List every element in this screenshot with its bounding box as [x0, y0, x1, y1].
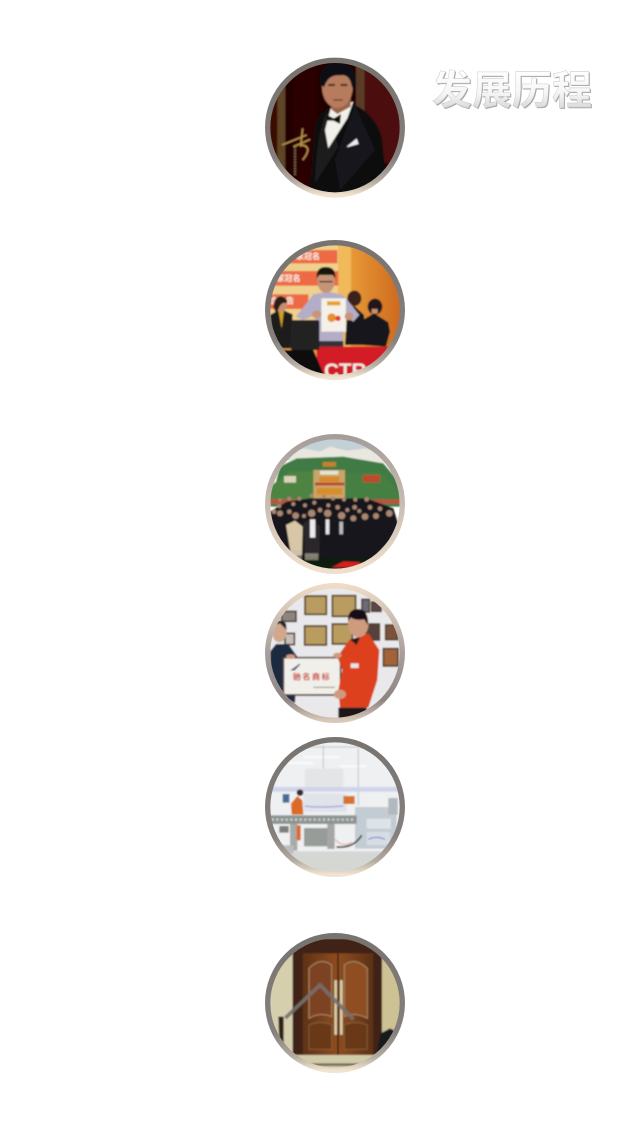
stage banners: 家冠名 [277, 273, 301, 283]
photo circle: celebrity in tuxedo [260, 57, 410, 197]
title: 发展历程 [433, 70, 593, 114]
foreground seat [291, 320, 319, 350]
house roof outline [285, 985, 353, 1019]
suit [309, 105, 388, 197]
photo circle: famous trademark award: 驰名商标 [293, 672, 331, 682]
panels [309, 962, 332, 1018]
right side people [345, 306, 366, 345]
stage banners: 合作告 [270, 296, 294, 306]
certificate [321, 298, 346, 332]
dark plant [376, 1028, 394, 1052]
official in uniform [270, 644, 297, 703]
pocket square [347, 138, 359, 147]
bow tie [327, 114, 341, 124]
floor [290, 851, 382, 872]
main man [296, 292, 359, 343]
photo circle: man holding certificate on stage [260, 242, 410, 383]
red table [315, 345, 388, 374]
ceiling structure [288, 756, 366, 767]
palace [313, 470, 345, 502]
floor [302, 558, 370, 569]
machine body [303, 794, 347, 812]
door handles [334, 980, 337, 1035]
photo circle: factory production line [260, 739, 410, 879]
title: 发展历程 [432, 69, 592, 113]
signature [282, 128, 310, 160]
stage banners [267, 250, 338, 309]
floor [280, 1055, 390, 1075]
door frame [293, 938, 382, 1055]
neck and face [331, 97, 351, 114]
shirt [325, 102, 353, 148]
wall plaques [282, 596, 398, 666]
conveyor [270, 815, 357, 824]
photo circle: famous trademark award [260, 585, 410, 725]
left woman [270, 309, 293, 348]
photo circle: group photo before palace painting [260, 437, 410, 571]
photo circle: carved wooden double door [260, 933, 410, 1075]
stage banners: 家冠名 [296, 251, 320, 261]
man in orange jacket [337, 633, 379, 708]
crowd [270, 498, 400, 562]
certificate [283, 658, 341, 695]
hair [320, 63, 356, 87]
worker [291, 796, 303, 815]
timeline graphic [265, 58, 592, 1073]
photo circle: man holding certificate on stage: CTR [324, 360, 367, 383]
